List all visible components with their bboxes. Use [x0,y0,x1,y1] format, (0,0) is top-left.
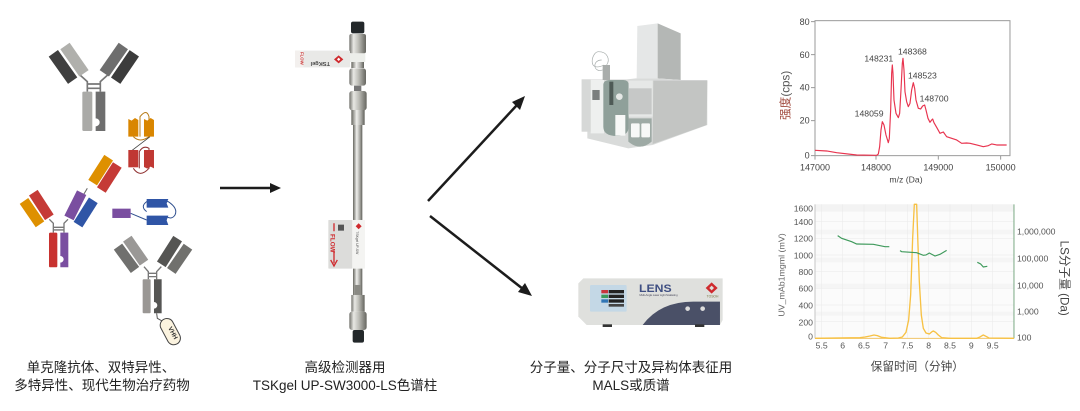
left axis ticks: 400 [799,301,813,311]
chart grid [815,204,1014,338]
caption: characterization: MALS或质谱 [592,378,670,393]
right axis ticks: 100,000 [1017,253,1048,263]
left axis ticks: 600 [799,284,813,294]
peak labels: 148231 [864,53,893,63]
column top label: TSKgel [310,60,330,66]
spectrum trace [815,58,1007,155]
x axis title: 保留时间（分钟） [871,359,964,373]
y axis ticks: 80 [800,17,810,27]
caption: characterization [530,360,732,393]
right axis ticks: 1,000,000 [1017,227,1056,237]
icon: LENS detector: LENS [639,283,672,295]
peak labels: 148059 [855,109,884,119]
left axis ticks: 200 [799,317,813,327]
x axis ticks: m/z (Da) [889,175,923,185]
x axis ticks: 149000 [923,163,953,173]
x axis ticks: 7.5 [901,340,914,350]
column lower label: TSKgel UP-SW [355,231,359,255]
icon: multispecific antibody [24,158,117,267]
y axis label: 强度(cps) [778,71,792,120]
x axis ticks: 6.5 [858,340,870,350]
x axis ticks: 9.5 [987,340,999,350]
left axis label: UV_mAb1mgml (mV) [777,233,787,317]
y axis ticks: 40 [800,83,810,93]
icon: blue and purple fragment [112,199,176,225]
left axis ticks: 800 [799,267,813,277]
column bottom fitting [349,285,367,343]
icon: mass spectrometer [582,23,707,148]
caption: antibody formats: 单克隆抗体、双特异性、 [27,360,175,375]
x axis ticks [800,163,1016,185]
x axis ticks: 148000 [861,163,891,173]
x axis ticks: 7 [883,340,888,350]
left axis ticks: 0 [808,332,813,342]
caption: column: 高级检测器用 [304,359,386,375]
right axis ticks: 100 [1017,332,1032,342]
x axis ticks: 6 [840,340,845,350]
caption: antibody formats: 多特异性、现代生物治疗药物 [14,377,190,393]
chart axes [815,204,1014,338]
x axis ticks: 147000 [800,163,830,173]
y axis ticks: 60 [800,50,810,60]
chart: chromatogram with LS molar mass [777,204,1070,373]
arrow: to column [220,183,281,193]
right axis label: LS分子量 (Da) [1057,241,1070,316]
y axis ticks: 0 [805,151,810,161]
right axis ticks: 1,000 [1017,306,1039,316]
right axis ticks: 10,000 [1017,280,1044,290]
arrow: to MALS [430,216,532,296]
x axis ticks: 150000 [986,163,1016,173]
peak labels: 148700 [920,93,949,103]
UV trace [815,204,1014,338]
icon: LENS detector: Multi-Angle Laser Light Scattering [639,293,678,297]
column top fitting [349,22,367,125]
icon: monoclonal antibody [53,46,134,131]
peak labels: 148368 [898,46,927,56]
icon: LENS detector: TOSOH [707,294,719,298]
icon: orange and red fragment [128,112,154,173]
left axis ticks [794,204,813,342]
peak labels: 148523 [908,71,937,81]
left axis ticks: 1000 [794,250,813,260]
panel: antibody formats [24,46,188,347]
left axis ticks: 1200 [794,234,813,244]
x axis ticks: 9 [969,340,974,350]
column tube [353,110,362,297]
x axis ticks: 5.5 [816,340,828,350]
arrow: to mass spectrometer [428,96,525,201]
column top label: FLOW [299,52,304,66]
chart frame and axes [811,21,1010,160]
caption: column [253,359,437,393]
icon: antibody with VHH [118,239,188,347]
caption: column: TSKgel UP-SW3000-LS色谱柱 [253,377,437,393]
icon: antibody with VHH: VHH [166,326,179,341]
icon: LENS detector [578,278,723,327]
y axis ticks [800,17,810,161]
chart: mass spectrum [778,17,1016,185]
x axis ticks [816,340,999,350]
caption: antibody formats [14,360,190,393]
molar mass traces [838,236,987,267]
column lower label [328,220,365,269]
column lower label: FLOW [328,234,335,253]
left axis ticks: 1400 [794,217,813,227]
peak labels [855,46,949,119]
x axis ticks: 8 [926,340,931,350]
y axis ticks: 20 [800,116,810,126]
left axis ticks: 1600 [794,204,813,214]
column top label [295,51,350,67]
panel: column [295,22,367,343]
right axis ticks [1017,227,1056,342]
x axis ticks: 8.5 [944,340,956,350]
caption: characterization: 分子量、分子尺寸及异构体表征用 [530,360,732,375]
